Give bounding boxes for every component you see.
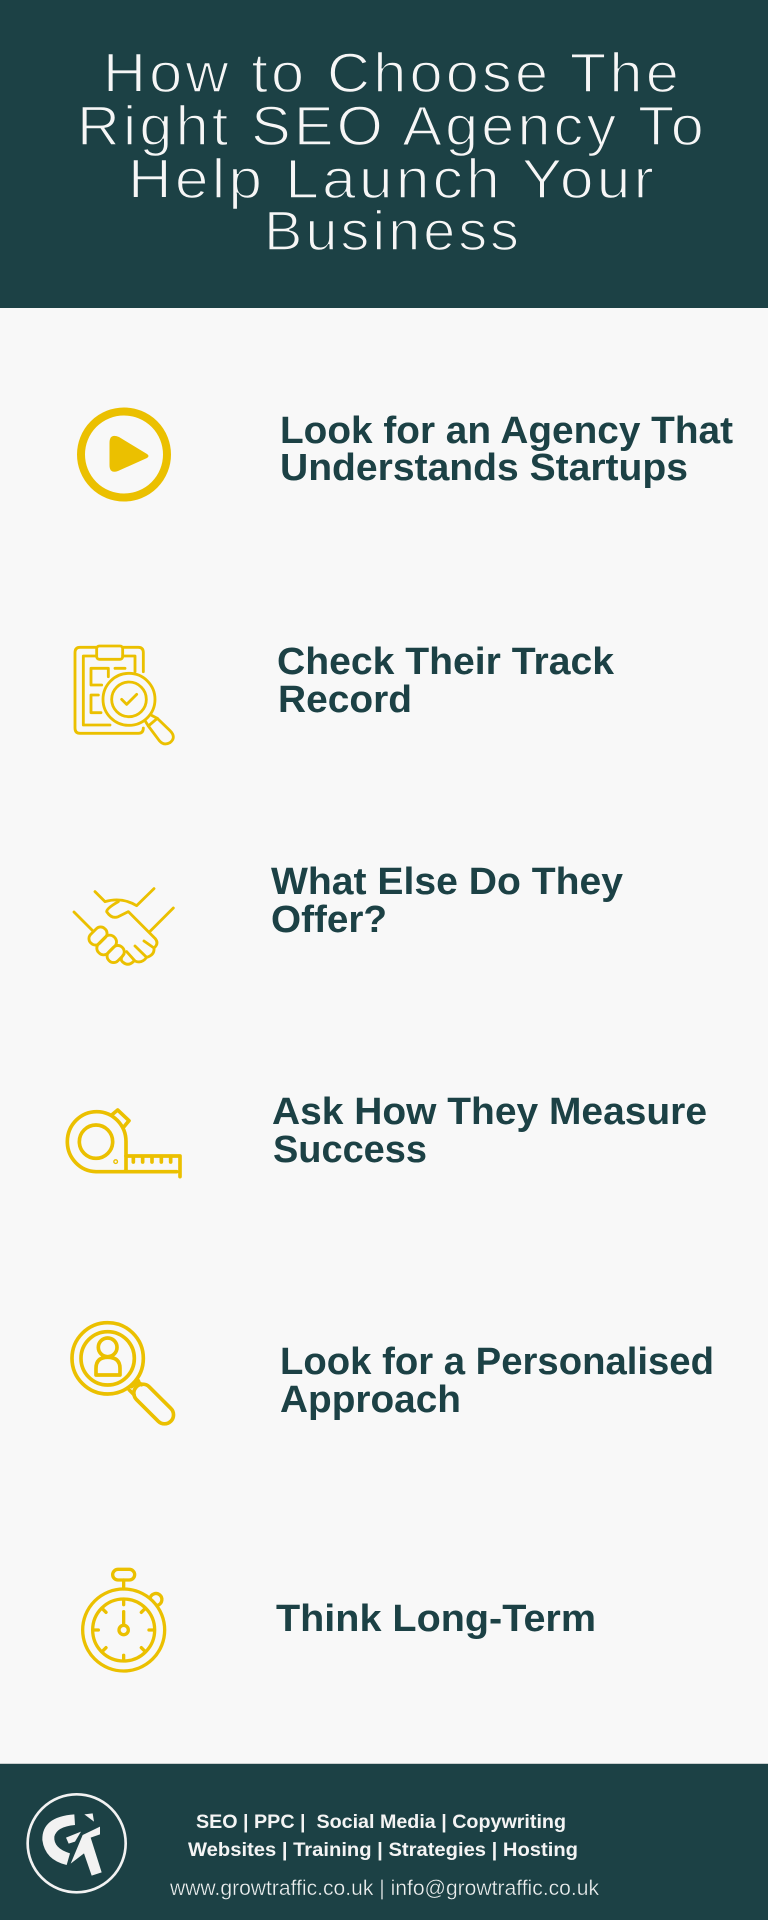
- title: [77, 41, 707, 262]
- header panel: [0, 0, 768, 308]
- heading: look for a personalised approach: Approach: [280, 1379, 461, 1421]
- heading: ask how they measure success: Ask How They Measure: [272, 1091, 707, 1133]
- heading: look for an agency: Look for an Agency That: [280, 410, 733, 452]
- services text: SEO | PPC | Social Media | Copywriting: [196, 1811, 566, 1833]
- icon: person magnifier: [72, 1323, 177, 1428]
- icon: play button: [81, 412, 167, 498]
- heading: think long-term: Think Long-Term: [276, 1598, 596, 1640]
- heading: ask how they measure success: Success: [273, 1129, 427, 1171]
- logo: [28, 1794, 126, 1892]
- icon: clipboard with magnifier: [75, 646, 173, 744]
- heading: check their track record: Check Their Track: [277, 641, 615, 683]
- icon: measuring tape: [67, 1110, 180, 1177]
- heading: check their track record: Record: [278, 679, 412, 721]
- heading: what else do they offer: Offer?: [271, 899, 387, 941]
- title: Right SEO Agency To: [77, 94, 707, 157]
- icon: handshake: [74, 889, 173, 965]
- heading: look for an agency: Understands Startups: [280, 447, 688, 489]
- footer panel: [0, 1763, 768, 1920]
- heading: look for a personalised approach: Look for a Personalised: [280, 1341, 714, 1383]
- icon: stopwatch: [83, 1569, 165, 1671]
- services text: Websites | Training | Strategies | Hosting: [188, 1839, 578, 1861]
- heading: check their track record: [277, 641, 615, 721]
- title: How to Choose The: [103, 41, 682, 104]
- services text: [188, 1811, 578, 1861]
- heading: ask how they measure success: [272, 1091, 707, 1171]
- title: Business: [264, 199, 522, 262]
- title: Help Launch Your: [128, 147, 657, 210]
- heading: look for a personalised approach: [280, 1341, 714, 1421]
- heading: what else do they offer: [271, 861, 623, 941]
- contact text: www.growtraffic.co.uk | info@growtraffic.co.uk: [169, 1877, 599, 1900]
- heading: what else do they offer: What Else Do They: [271, 861, 623, 903]
- heading: look for an agency: [280, 410, 733, 489]
